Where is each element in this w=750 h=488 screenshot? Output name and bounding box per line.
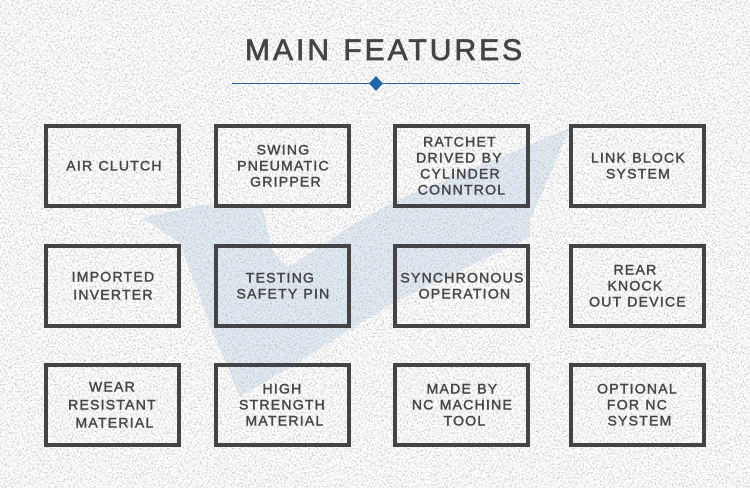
feature: imported inverter: INVERTER bbox=[73, 286, 154, 302]
feature: link block system: SYSTEM bbox=[606, 166, 671, 182]
feature: ratchet drived by cylinder control: CONNTROL bbox=[418, 182, 506, 198]
feature: imported inverter bbox=[46, 246, 179, 326]
feature: ratchet drived by cylinder control: CYLINDER bbox=[420, 166, 501, 182]
feature: link block system bbox=[571, 126, 704, 206]
feature: swing pneumatic gripper bbox=[216, 126, 349, 206]
feature: high strength material: HIGH bbox=[262, 380, 302, 396]
feature: optional for nc system: FOR NC bbox=[607, 396, 668, 412]
feature: made by nc machine tool: NC MACHINE bbox=[412, 396, 513, 412]
title: MAIN FEATURES bbox=[245, 34, 525, 67]
feature: optional for nc system: OPTIONAL bbox=[597, 380, 678, 396]
feature: ratchet drived by cylinder control bbox=[395, 126, 528, 206]
feature: optional for nc system bbox=[571, 365, 704, 445]
feature: air clutch: AIR CLUTCH bbox=[66, 158, 163, 174]
feature: made by nc machine tool bbox=[395, 365, 528, 445]
feature: rear knock out device: KNOCK bbox=[607, 278, 664, 294]
feature: wear resistant material: MATERIAL bbox=[76, 414, 154, 430]
feature: ratchet drived by cylinder control: RATCHET bbox=[423, 134, 497, 150]
feature: rear knock out device: OUT DEVICE bbox=[589, 294, 687, 310]
title divider with diamond bbox=[232, 76, 520, 91]
feature: testing safety pin bbox=[216, 246, 349, 326]
feature: high strength material: MATERIAL bbox=[246, 412, 324, 428]
feature: made by nc machine tool: MADE BY bbox=[427, 380, 498, 396]
feature: swing pneumatic gripper: SWING bbox=[257, 142, 310, 158]
feature: ratchet drived by cylinder control: DRIVED BY bbox=[416, 150, 503, 166]
feature: link block system: LINK BLOCK bbox=[591, 150, 686, 166]
feature: rear knock out device bbox=[571, 246, 704, 326]
feature: synchronous operation: SYNCHRONOUS bbox=[400, 270, 525, 286]
feature: testing safety pin: TESTING bbox=[246, 270, 315, 286]
feature: synchronous operation bbox=[395, 246, 528, 326]
feature: air clutch bbox=[46, 126, 179, 206]
feature: high strength material bbox=[216, 365, 349, 445]
feature: made by nc machine tool: TOOL bbox=[444, 412, 486, 428]
feature: synchronous operation: OPERATION bbox=[419, 286, 511, 302]
feature: optional for nc system: SYSTEM bbox=[607, 412, 673, 428]
feature: wear resistant material: WEAR bbox=[89, 378, 136, 394]
feature: testing safety pin: SAFETY PIN bbox=[237, 286, 330, 302]
feature: swing pneumatic gripper: GRIPPER bbox=[250, 174, 322, 190]
feature: wear resistant material bbox=[46, 365, 179, 445]
feature: swing pneumatic gripper: PNEUMATIC bbox=[237, 158, 330, 174]
feature: high strength material: STRENGTH bbox=[239, 396, 326, 412]
watermark: check mark bbox=[142, 128, 570, 397]
feature: imported inverter: IMPORTED bbox=[72, 268, 155, 284]
feature: wear resistant material: RESISTANT bbox=[68, 396, 157, 412]
feature: rear knock out device: REAR bbox=[614, 262, 657, 278]
